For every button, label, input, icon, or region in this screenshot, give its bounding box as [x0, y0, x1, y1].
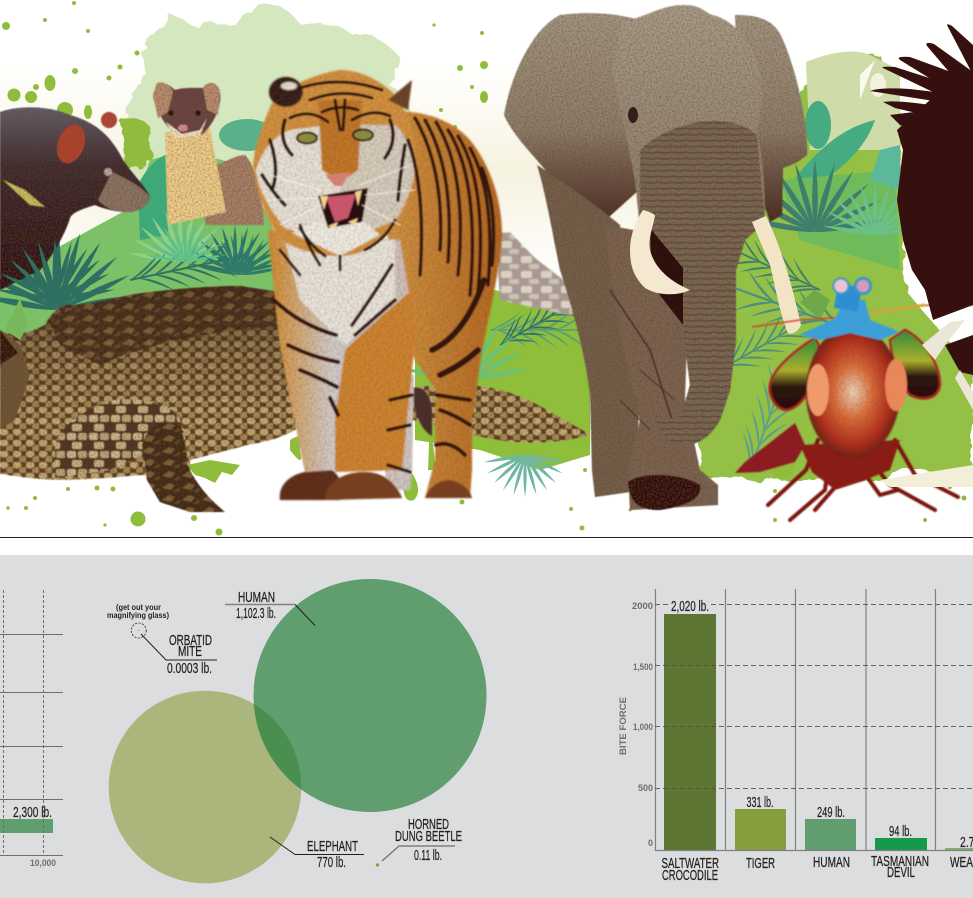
tiger stripes [274, 118, 494, 472]
label: elephant: ELEPHANT [307, 839, 358, 855]
shrimp legs [768, 440, 958, 520]
chart: weight bar (cropped) [0, 590, 63, 869]
label: orbatid mite: (get out your [116, 602, 162, 612]
label: human: 1,102.3 lb. [236, 606, 276, 622]
category labels: TASMANIAN [871, 854, 929, 870]
axis ticks [632, 601, 653, 849]
axis ticks: 2000 [632, 601, 653, 612]
circle: human [254, 579, 486, 812]
label: orbatid mite: 0.0003 lb. [167, 661, 212, 677]
grey crocodile tail section [495, 232, 572, 316]
category labels: HUMAN [813, 855, 850, 871]
crocodile front leg [55, 399, 225, 512]
label: elephant: 770 lb. [317, 855, 346, 871]
axis title: BITE FORCE [618, 697, 628, 755]
shrimp tail wing [735, 423, 805, 473]
label: horned dung beetle: HORNED [408, 817, 449, 833]
tiger front legs [268, 230, 412, 472]
jungle leaves and green backdrop [0, 51, 973, 497]
foreground fronds [144, 220, 226, 264]
crocodile [0, 286, 310, 512]
value label: 2,300 lb. [13, 805, 52, 821]
jungle tree silhouette [125, 4, 420, 190]
category labels: CROCODILE [662, 868, 718, 884]
crocodile tail [412, 385, 590, 442]
elephant tusks [630, 210, 690, 294]
circle: elephant [109, 691, 301, 883]
axis ticks: 0 [648, 838, 653, 849]
elephant ears [504, 13, 650, 225]
chart: proportional weight circles [107, 579, 486, 883]
tiger middle leg [385, 375, 414, 490]
Tasmanian devil [0, 107, 150, 290]
category labels: TIGER [746, 856, 775, 872]
baseline rule [0, 537, 973, 538]
value labels [671, 599, 973, 851]
label: horned dung beetle: DUNG BEETLE [395, 829, 462, 845]
label: orbatid mite [107, 602, 217, 677]
label: orbatid mite: ORBATID [169, 633, 212, 649]
axis ticks: 1,000 [633, 722, 653, 733]
panel: animal illustration [0, 0, 973, 538]
tiger facial features [262, 82, 415, 256]
label: elephant [270, 837, 364, 871]
label: human [225, 590, 315, 626]
paint splatter [2, 1, 966, 536]
chart: bite force bars [618, 589, 973, 884]
bird wing silhouette [870, 24, 973, 375]
bars [664, 614, 973, 850]
background wash [0, 60, 973, 280]
weasel [153, 82, 264, 225]
label: horned dung beetle: 0.11 lb. [414, 848, 442, 864]
value labels: 2,020 lb. [671, 599, 709, 615]
label: human: HUMAN [238, 590, 275, 606]
axis ticks: 1,500 [633, 662, 653, 673]
value labels: 249 lb. [817, 805, 845, 821]
mantis shrimp [735, 278, 973, 520]
label: orbatid mite: magnifying glass) [107, 610, 169, 620]
elephant [504, 5, 807, 510]
panel: grey data section [0, 555, 973, 898]
value labels: 94 lb. [889, 824, 912, 840]
label: orbatid mite: MITE [178, 644, 202, 660]
category labels: DEVIL [887, 865, 915, 881]
elephant head and trunk [612, 5, 765, 445]
tiger head [253, 70, 416, 256]
category labels [662, 854, 973, 884]
weight bar [0, 819, 53, 833]
shrimp head and eyes [800, 300, 900, 340]
axis ticks: 500 [638, 783, 653, 794]
tiger [253, 70, 502, 500]
bird white feathers [922, 320, 973, 410]
value labels: 331 lb. [746, 795, 774, 811]
shrimp carapace [806, 326, 900, 458]
elephant legs [537, 165, 640, 497]
cream ground patch [880, 465, 973, 487]
circle overlap [254, 704, 302, 790]
category labels: SALTWATER [662, 856, 719, 872]
label: horned dung beetle [376, 817, 462, 867]
tiger body [380, 112, 502, 498]
shrimp raptorial wings [770, 338, 819, 410]
axis tick: 10,000 [30, 858, 56, 869]
